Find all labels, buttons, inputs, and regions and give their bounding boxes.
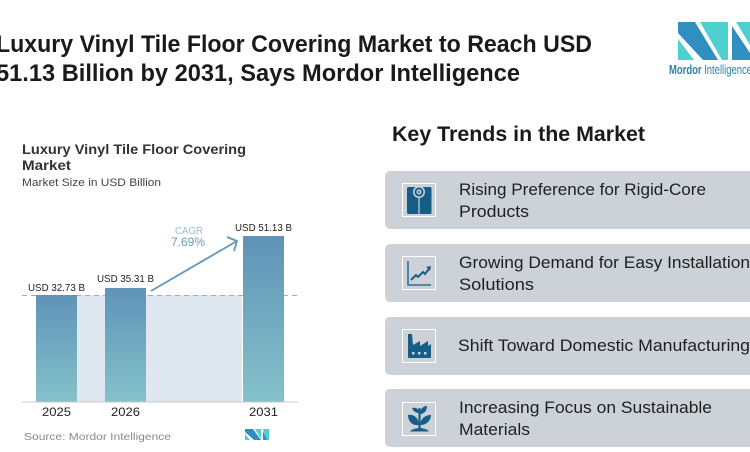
card: rigid-core: Rising Preference for Rigid-Core	[459, 181, 706, 199]
bar chart: USD 51.13 B	[235, 223, 292, 234]
card: easy installation: Growing Demand for Easy Installation	[459, 254, 750, 272]
icon: factory	[402, 330, 436, 362]
card: easy installation: Solutions	[459, 276, 534, 294]
icon: scale	[402, 184, 436, 216]
card: rigid-core	[385, 171, 750, 229]
arrow: growth	[151, 237, 237, 291]
chart heading: Market Size in USD Billion	[22, 177, 161, 189]
source: Source: Mordor Intelligence	[24, 431, 171, 443]
card: easy installation	[385, 244, 750, 302]
bar chart	[22, 223, 300, 419]
card: domestic manufacturing	[385, 317, 750, 375]
icon: plant	[402, 402, 436, 436]
panel: market size chart	[22, 142, 300, 443]
small logo	[245, 429, 269, 440]
CAGR callout: CAGR	[175, 226, 203, 237]
bar chart: 2031	[249, 407, 278, 419]
title	[0, 31, 592, 87]
card: rigid-core: Products	[459, 203, 529, 221]
card: sustainable materials: Increasing Focus on Sustainable	[459, 399, 712, 417]
bar chart: USD 32.73 B	[28, 283, 85, 294]
card: sustainable materials: Materials	[459, 421, 530, 439]
CAGR callout	[171, 226, 205, 249]
logo: Mordor Intelligence	[669, 22, 750, 77]
card: domestic manufacturing: Shift Toward Domestic Manufacturing	[458, 337, 750, 355]
card: sustainable materials	[385, 389, 750, 447]
icon: line chart	[402, 256, 436, 290]
title: 51.13 Billion by 2031, Says Mordor Intelligence	[0, 60, 520, 87]
bar chart: 2026	[111, 407, 140, 419]
chart heading	[22, 142, 246, 189]
CAGR callout: 7.69%	[171, 237, 205, 249]
heading: key trends: Key Trends in the Market	[392, 123, 645, 146]
title: Luxury Vinyl Tile Floor Covering Market to Reach USD	[0, 31, 592, 58]
bar chart: USD 35.31 B	[97, 274, 154, 285]
bar chart: 2025	[42, 407, 71, 419]
chart heading: Market	[22, 158, 72, 173]
chart heading: Luxury Vinyl Tile Floor Covering	[22, 142, 246, 157]
